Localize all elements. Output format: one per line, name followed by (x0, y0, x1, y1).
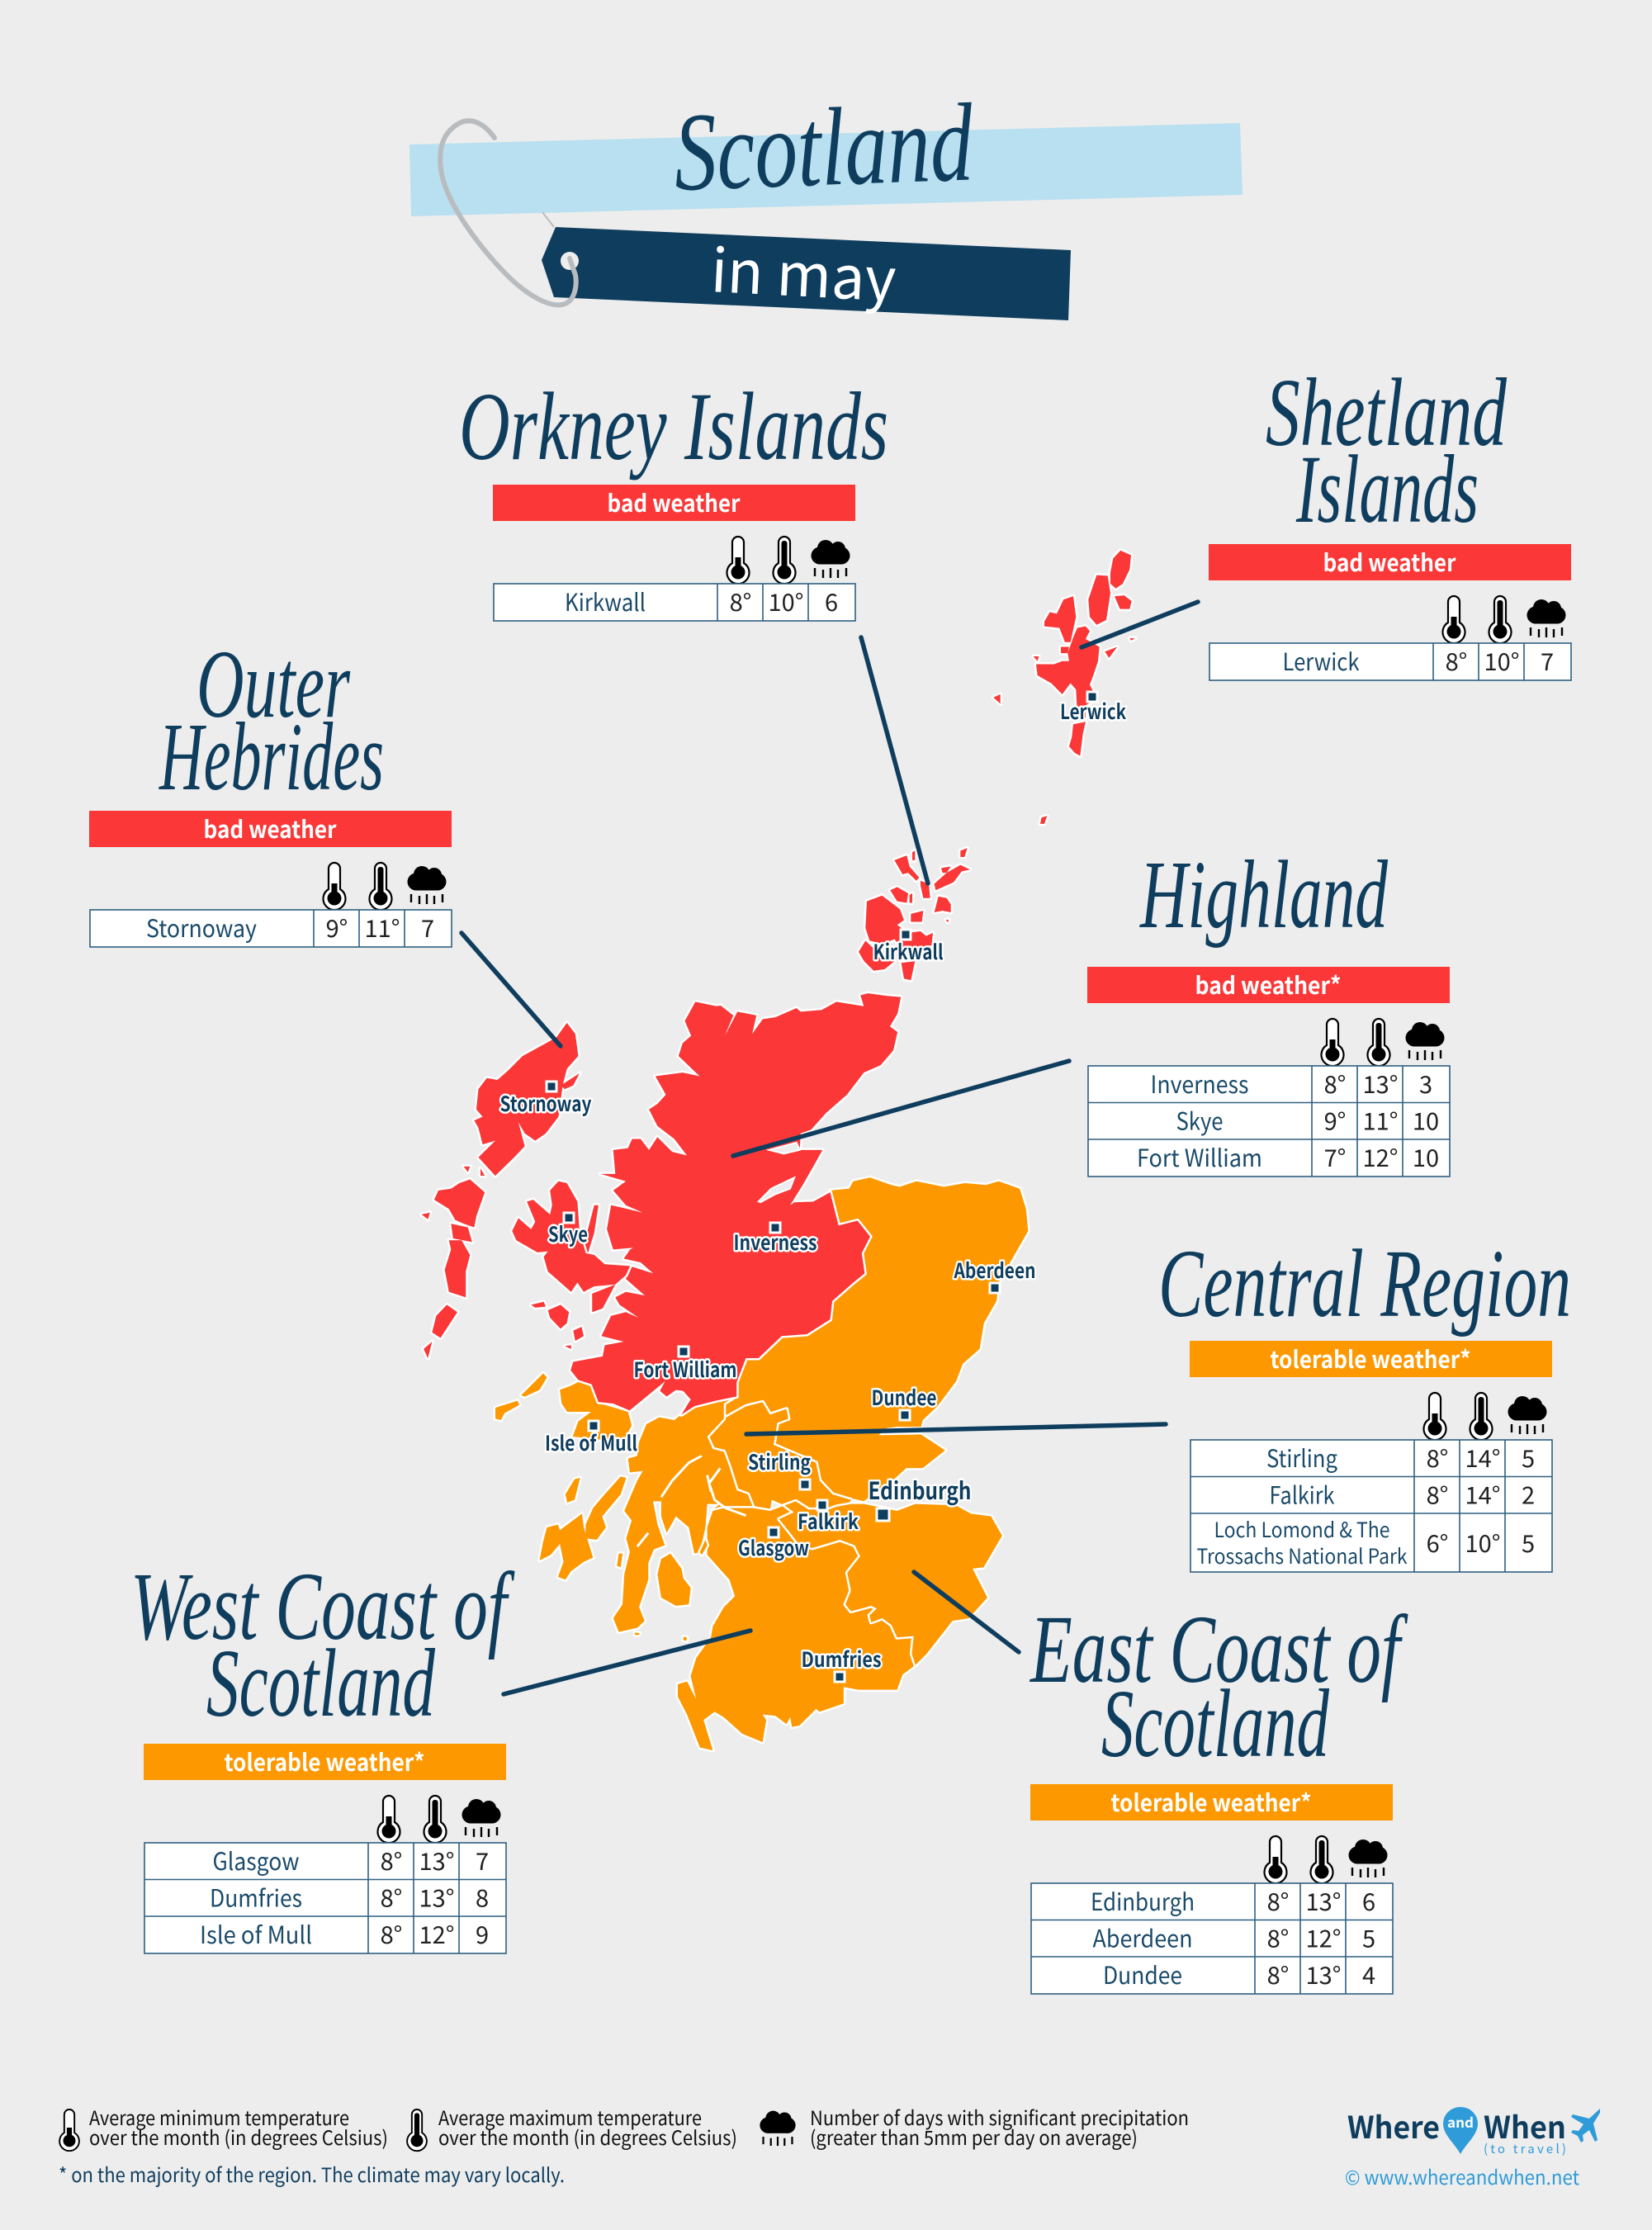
weather table: 13° (1306, 1957, 1341, 1991)
legend: maximum temperature (407, 2102, 737, 2151)
panel: Highland (1087, 840, 1450, 1177)
short string (542, 212, 554, 227)
weather table: 10 (1413, 1103, 1439, 1138)
weather table: 11° (1363, 1103, 1398, 1138)
title banner (409, 81, 1243, 320)
weather table: 8° (730, 584, 751, 618)
city labels: Fort William (634, 1354, 736, 1384)
logo: Where and When: When (1484, 2103, 1566, 2147)
keyring (440, 121, 576, 305)
weather table: 13° (419, 1879, 454, 1914)
orange regions: tolerable weather (495, 1177, 1028, 1750)
firths cut into the Highland coast (759, 1143, 800, 1202)
weather table: 6° (1427, 1525, 1448, 1560)
weather table: 10° (1484, 643, 1519, 678)
weather table (493, 485, 855, 621)
weather table: bad weather (203, 811, 337, 845)
weather table: Stirling (1266, 1440, 1337, 1475)
logo: Where and When: (to travel) (1484, 2140, 1566, 2157)
weather table: 6 (1362, 1883, 1375, 1918)
weather table: Dumfries (210, 1879, 302, 1914)
weather table: 9 (476, 1916, 489, 1951)
weather table: 5 (1522, 1525, 1535, 1560)
weather table: 13° (1306, 1883, 1341, 1918)
Highland mainland (570, 993, 901, 1414)
map of Scotland (422, 551, 1135, 1750)
light blue ribbon (409, 123, 1243, 216)
legend: precipitation (760, 2102, 1189, 2151)
south-west Scotland (678, 1505, 916, 1750)
weather table: 8° (1446, 643, 1467, 678)
weather table: Skye (1176, 1103, 1224, 1138)
heading: Highland (1139, 840, 1389, 949)
city labels: Inverness (733, 1227, 817, 1257)
legend: maximum temperature: Average maximum temperature (438, 2102, 702, 2131)
city labels: Dumfries (801, 1644, 882, 1674)
city labels: Stirling (748, 1446, 811, 1476)
weather table: Falkirk (1270, 1476, 1334, 1511)
weather table: 10 (1413, 1139, 1439, 1174)
legend: maximum temperature: over the month (in degrees Celsius) (438, 2122, 737, 2151)
legend: precipitation: (greater than 5mm per day on average) (810, 2122, 1138, 2151)
weather table: 8° (1267, 1920, 1289, 1955)
Central region (708, 1402, 851, 1511)
Tayside and Grampian (724, 1177, 1028, 1501)
weather table: bad weather* (1195, 967, 1341, 1001)
website credit: © www.whereandwhen.net (1345, 2161, 1579, 2190)
legend: precipitation: Number of days with significant precipitation (810, 2102, 1189, 2131)
weather table: 8° (1324, 1066, 1346, 1101)
weather table: bad weather (1323, 544, 1456, 579)
panel: East Coast of Scotland (1030, 1595, 1408, 1994)
weather table: 8° (1427, 1440, 1448, 1475)
weather table: tolerable weather* (1270, 1341, 1471, 1375)
city labels: Falkirk (798, 1506, 859, 1536)
weather table: 6 (825, 584, 838, 618)
weather table (1209, 544, 1571, 680)
heading: Scotland (206, 1629, 436, 1737)
weather table: Kirkwall (565, 584, 646, 618)
weather table: 10° (769, 584, 803, 618)
weather table: 14° (1465, 1476, 1500, 1511)
weather table: Trossachs National Park (1197, 1541, 1408, 1570)
heading: Hebrides (159, 703, 384, 811)
weather table: 8° (381, 1879, 402, 1914)
logo: Where and When: Where (1347, 2103, 1440, 2147)
footnote: * on the majority of the region. The climate may vary locally. (59, 2159, 565, 2188)
weather table (1190, 1341, 1552, 1572)
subtitle: in may: in may (709, 222, 898, 319)
weather table: Dundee (1103, 1957, 1182, 1991)
plane (1571, 2109, 1600, 2142)
weather table: 8° (1427, 1476, 1448, 1511)
city labels: Skye (548, 1219, 588, 1248)
weather table: 12° (1363, 1139, 1398, 1174)
Inner Hebrides south: Mull, Jura, Islay, Arran (495, 1373, 708, 1641)
heading: West Coast of (130, 1552, 515, 1660)
weather table: 11° (365, 910, 400, 945)
heading: Orkney Islands (459, 372, 888, 481)
map pin (1443, 2107, 1478, 2154)
legend: minimum temperature (59, 2102, 388, 2151)
weather table: tolerable weather* (1111, 1784, 1311, 1819)
red regions: bad weather (422, 551, 1135, 1414)
city labels: Aberdeen (954, 1255, 1035, 1285)
weather table: 7° (1324, 1139, 1346, 1174)
city labels (500, 696, 1126, 1674)
weather table: 12° (419, 1916, 454, 1951)
city labels: Dundee (872, 1382, 936, 1412)
legend (59, 2102, 1189, 2188)
weather table (1087, 967, 1450, 1177)
heading: Scotland (1101, 1669, 1330, 1778)
weather table: 9° (1324, 1103, 1346, 1138)
weather table (144, 1744, 506, 1953)
panel: West Coast of Scotland (130, 1552, 515, 1953)
panel: Central Region (1158, 1229, 1571, 1572)
weather table: 5 (1362, 1920, 1375, 1955)
weather table: 2 (1522, 1476, 1535, 1511)
weather table: 4 (1362, 1957, 1375, 1991)
weather table: tolerable weather* (225, 1744, 424, 1778)
weather table: 5 (1522, 1440, 1535, 1475)
Orkney and Shetland islands (859, 551, 1135, 980)
weather table: 12° (1306, 1920, 1341, 1955)
weather table: 13° (1363, 1066, 1398, 1101)
city labels: Stornoway (500, 1088, 592, 1118)
city labels: Glasgow (738, 1532, 809, 1562)
city labels: Lerwick (1060, 696, 1126, 726)
weather table (89, 811, 452, 947)
weather table: Stornoway (146, 910, 257, 945)
Lothian and Borders (779, 1501, 1002, 1665)
panel: Shetland Islands (1209, 358, 1571, 680)
title: Scotland: Scotland (672, 81, 975, 215)
city labels: Isle of Mull (545, 1427, 637, 1457)
weather table: 8° (381, 1916, 402, 1951)
weather table: 14° (1465, 1440, 1500, 1475)
legend: minimum temperature: over the month (in degrees Celsius) (89, 2122, 388, 2151)
heading: East Coast of (1030, 1595, 1408, 1703)
weather table: 7 (1541, 643, 1554, 678)
weather table: 7 (421, 910, 434, 945)
weather table: 9° (326, 910, 348, 945)
weather table: Lerwick (1283, 643, 1359, 678)
weather table: Edinburgh (1091, 1883, 1195, 1918)
weather table: Aberdeen (1093, 1920, 1192, 1955)
weather table: Isle of Mull (200, 1916, 312, 1951)
weather table: 7 (476, 1843, 489, 1877)
weather table: 3 (1419, 1066, 1432, 1101)
weather table: 8° (1267, 1883, 1289, 1918)
city labels: Kirkwall (873, 936, 944, 966)
weather table: 8° (1267, 1957, 1289, 1991)
weather table: 8° (381, 1843, 402, 1877)
navy tag (542, 227, 1071, 320)
weather table: Fort William (1137, 1139, 1262, 1174)
weather table: Glasgow (213, 1843, 299, 1877)
logo: Where and When (1345, 2103, 1600, 2190)
weather table (1030, 1784, 1393, 1994)
weather table: bad weather (608, 485, 741, 519)
weather table: Inverness (1151, 1066, 1248, 1101)
panel: Outer Hebrides (89, 630, 452, 947)
weather table: 8 (476, 1879, 489, 1914)
Outer Hebrides and Skye (422, 1023, 630, 1358)
tag hole (561, 252, 579, 270)
weather table: 13° (419, 1843, 454, 1877)
weather table: Loch Lomond & The (1214, 1514, 1390, 1544)
city markers (547, 692, 1097, 1682)
weather table: 10° (1465, 1525, 1500, 1560)
heading: Outer (196, 630, 351, 738)
Argyll and Kintyre (613, 1397, 753, 1632)
city labels: Edinburgh (869, 1472, 971, 1507)
heading: Shetland (1266, 358, 1508, 466)
legend: minimum temperature: Average minimum temperature (89, 2102, 349, 2131)
heading: Islands (1295, 435, 1479, 543)
leader lines (462, 602, 1198, 1694)
logo: Where and When: and (1447, 2111, 1474, 2132)
panel: Orkney Islands (459, 372, 888, 621)
white sea lochs (637, 1456, 746, 1546)
